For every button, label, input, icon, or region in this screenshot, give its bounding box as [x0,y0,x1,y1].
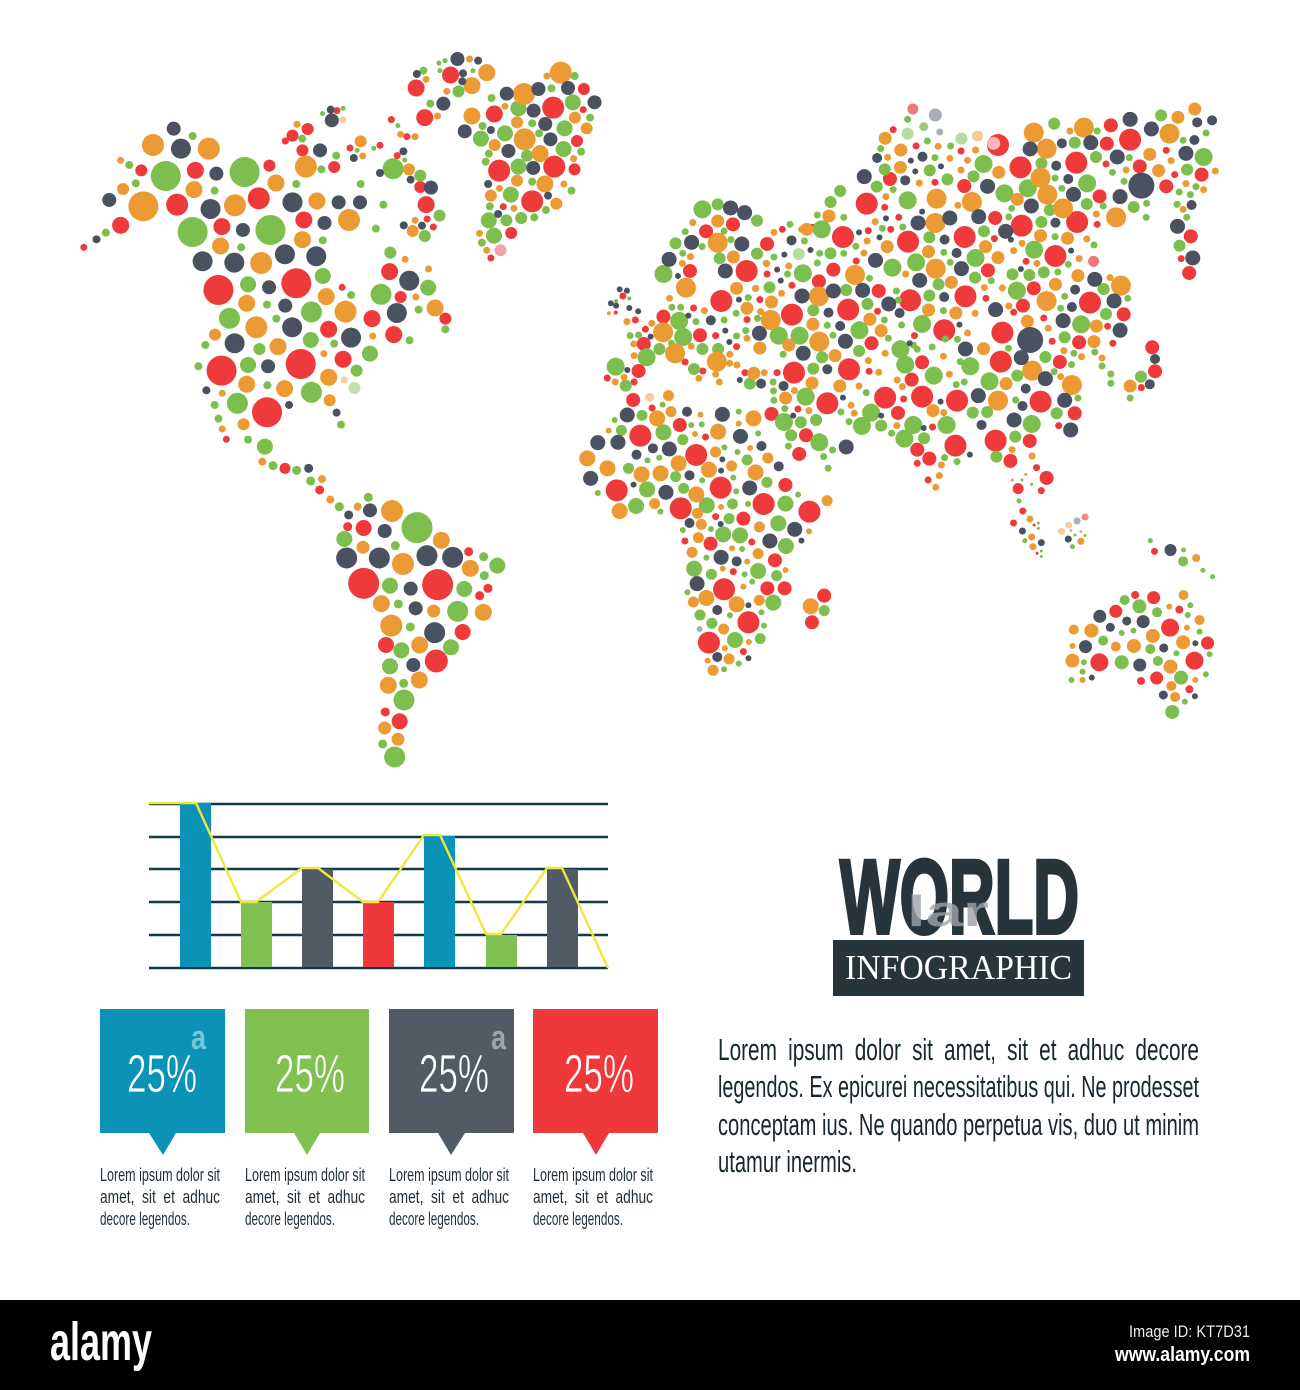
footer bar [0,1300,1300,1390]
bar 1 [180,803,211,967]
world map made of dots [84,59,1215,757]
footer bar: alamy [50,1312,152,1372]
Africa dots [587,396,827,670]
caption 3: Lorem ipsum dolor sit [389,1165,509,1185]
bar chart [149,803,608,968]
bar 3 [302,869,333,967]
callout: blue 25%: a [191,1019,207,1057]
caption 4 [533,1165,653,1229]
South America dots [262,462,497,757]
callout: grey 25%: 25% [419,1044,489,1104]
South-East Asia islands dots [1012,474,1085,557]
description paragraph: utamur inermis. [718,1144,857,1179]
callout: red 25%: 25% [564,1044,634,1104]
caption 4: amet, sit et adhuc [533,1187,653,1207]
caption 2: decore legendos. [245,1209,335,1229]
caption 3 [389,1165,509,1229]
New Guinea dots [1150,541,1213,577]
caption 2 [245,1165,365,1229]
trend line [149,803,608,968]
title: lar [907,887,989,936]
caption 4: decore legendos. [533,1209,623,1229]
caption 1 [100,1165,220,1229]
bar 4 [363,902,394,967]
title: INFOGRAPHIC [845,948,1072,987]
Europe and Asia dots [607,109,1215,487]
callout: grey 25%: a [491,1019,507,1057]
title [833,839,1084,996]
callout: red 25% [533,1009,658,1155]
description paragraph [718,1032,1199,1179]
footer bar: Image ID: KT7D31 [1129,1322,1250,1341]
bar 2 [241,902,272,967]
caption 2: Lorem ipsum dolor sit [245,1165,365,1185]
caption 1: amet, sit et adhuc [100,1187,220,1207]
callout: blue 25%: 25% [127,1044,197,1104]
callout: grey 25% [389,1009,514,1155]
title: WORLD [840,839,1079,956]
North America and Greenland dots [84,59,595,447]
bar 6 [486,935,517,967]
callout: blue 25% [100,1009,225,1155]
footer bar: www.alamy.com [1114,1344,1250,1366]
caption 4: Lorem ipsum dolor sit [533,1165,653,1185]
caption 1: Lorem ipsum dolor sit [100,1165,220,1185]
callout: green 25% [245,1009,369,1155]
Africa, South-East Asia and Oceania dots [587,396,1213,712]
bar 7 [547,869,578,967]
Australia dots [1072,595,1210,712]
caption 3: decore legendos. [389,1209,479,1229]
caption 1: decore legendos. [100,1209,190,1229]
caption 3: amet, sit et adhuc [389,1187,509,1207]
caption 2: amet, sit et adhuc [245,1187,365,1207]
callout: green 25%: 25% [275,1044,345,1104]
bar 5 [424,836,455,967]
